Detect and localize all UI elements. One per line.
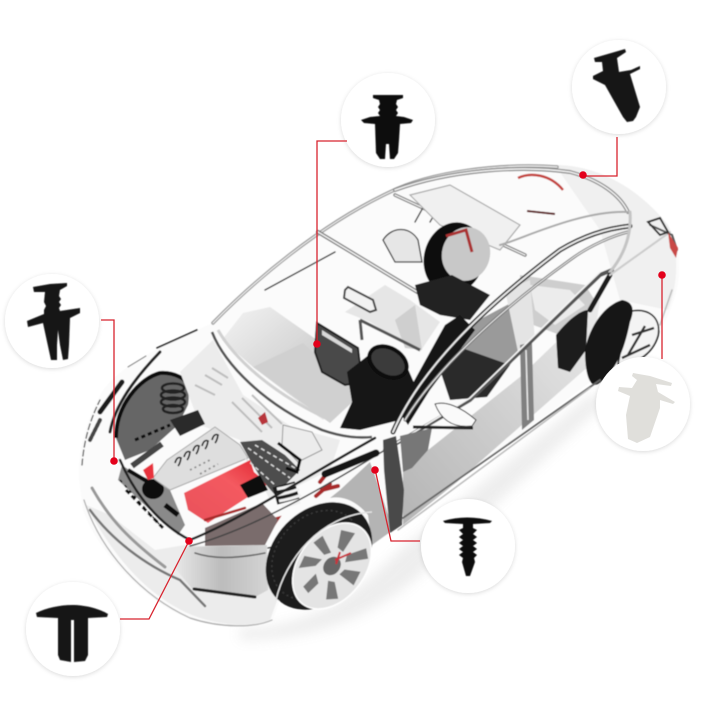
leader line: top-right to roof bbox=[579, 137, 617, 179]
front seat pale bbox=[395, 305, 422, 350]
battery box bbox=[282, 425, 322, 462]
dashboard console black bbox=[340, 350, 415, 430]
rear headrest bbox=[383, 230, 422, 262]
ground shadow bbox=[240, 395, 610, 640]
clip icon: ribbed screw clip bbox=[443, 518, 492, 576]
leader line: top-centre to seat bbox=[313, 141, 347, 348]
clip icon: left bbox=[27, 283, 80, 360]
central cabin mid grey bbox=[450, 298, 525, 395]
front headrest loop bbox=[344, 287, 376, 312]
coil spring left bbox=[161, 384, 185, 413]
clip icon: top-centre bbox=[361, 95, 413, 159]
leader line: left to engine bay bbox=[101, 320, 118, 465]
dark pillar band bbox=[398, 315, 475, 425]
bumper dark slits bbox=[82, 400, 272, 626]
small red mark bbox=[143, 463, 154, 480]
clip icon: pale plastic rivet bbox=[618, 373, 675, 443]
car body silhouette bbox=[79, 166, 679, 627]
leader line: fender to screw clip bbox=[371, 466, 420, 541]
mirror arm bbox=[413, 427, 473, 428]
callout: top-centre clip circle bbox=[341, 73, 435, 167]
instrument frame light window bbox=[322, 330, 352, 353]
engine bay deck bbox=[180, 340, 340, 500]
instrument frame dark bbox=[315, 323, 362, 385]
rear seat pale bbox=[520, 275, 598, 335]
red suspension arms bbox=[205, 472, 338, 532]
windshield lower arc bbox=[212, 332, 372, 437]
red accent on ribbed box bbox=[258, 412, 268, 425]
windshield inner arc bbox=[218, 330, 330, 420]
roof red trim bbox=[518, 175, 563, 190]
mid cabin pale floor bbox=[345, 285, 440, 352]
rear deck light area bbox=[555, 165, 676, 310]
battery handle bbox=[278, 443, 300, 472]
callout: right pale clip circle bbox=[596, 357, 690, 451]
marker dot bbox=[185, 537, 193, 545]
rear wheel tyre bbox=[585, 300, 633, 385]
marker dot bbox=[371, 466, 379, 474]
hood outline strokes bbox=[90, 330, 197, 440]
engine bay dark well bbox=[116, 373, 189, 460]
engine bay dark rim bbox=[116, 373, 187, 438]
door sill lines bbox=[398, 225, 677, 530]
clip icon: mushroom rivet bbox=[36, 605, 108, 662]
rear spoiler dark bbox=[648, 218, 668, 235]
strut tower bracket bbox=[170, 410, 205, 436]
seat structure outline bbox=[360, 320, 420, 350]
tyre tread hint bbox=[254, 493, 378, 617]
spare wheel tyre bbox=[416, 215, 492, 301]
bumper centre grey bbox=[175, 545, 268, 597]
black strut mount bbox=[142, 479, 164, 499]
marker dot bbox=[313, 340, 321, 348]
spare wheel red detail bbox=[446, 230, 472, 252]
front wheel rim bbox=[276, 508, 388, 624]
rear seat frame dark bbox=[415, 275, 490, 320]
cabin pale strip bbox=[505, 280, 535, 352]
rim spoke openings bbox=[287, 517, 379, 612]
leader line: rear to pale clip bbox=[658, 271, 666, 359]
callout: bottom-left mushroom clip circle bbox=[26, 582, 120, 676]
engine cover ribs bbox=[175, 435, 218, 474]
front door a-pillar arcs bbox=[385, 212, 630, 450]
steering wheel bbox=[364, 340, 412, 384]
front frame rails bbox=[120, 438, 385, 548]
intake manifold highlights bbox=[245, 445, 295, 485]
engine cover silver bbox=[153, 427, 248, 490]
door lower panel bbox=[403, 300, 600, 525]
intake manifold busy dark bbox=[240, 440, 300, 495]
door quarter dark bbox=[400, 428, 432, 472]
front radiator hoses bbox=[120, 425, 178, 530]
wheel arch arc bbox=[276, 512, 372, 600]
callout: left clip circle bbox=[5, 274, 99, 368]
red wheel hub mark bbox=[335, 552, 351, 564]
wing mirror bbox=[435, 403, 476, 426]
b-pillar highlight bbox=[526, 350, 528, 420]
grey dash top bbox=[253, 343, 360, 423]
car: transparent x-ray sedan bbox=[79, 165, 679, 640]
radiator and front tangle bbox=[118, 465, 185, 535]
red engine block bbox=[184, 460, 268, 523]
marker dot bbox=[579, 171, 587, 179]
front bumper panel bbox=[86, 505, 278, 625]
front fender grey panel bbox=[330, 462, 393, 545]
rear rim spokes bbox=[622, 326, 654, 358]
b-pillar bbox=[520, 342, 534, 430]
right coil spring bbox=[275, 483, 301, 507]
front door pillar dark bbox=[383, 436, 404, 533]
leader line: bumper to mushroom clip bbox=[120, 537, 193, 619]
windshield dash panel bbox=[222, 307, 358, 420]
rear seat highlight bbox=[530, 285, 585, 325]
lower engine shadow bbox=[205, 503, 278, 546]
rear wheel rim bbox=[618, 310, 659, 364]
intake block black bbox=[240, 475, 268, 498]
deck stripes bbox=[195, 368, 282, 432]
tail light bbox=[668, 232, 678, 258]
cabin lower dark bbox=[440, 348, 510, 400]
roof and windshield rails bbox=[213, 166, 628, 323]
clip icon: top-right bbox=[593, 49, 640, 122]
marker dot bbox=[110, 457, 118, 465]
callout: top-right clip circle bbox=[572, 40, 666, 134]
front wheel tyre bbox=[244, 481, 394, 631]
callout: bottom-right screw clip circle bbox=[421, 499, 515, 593]
rear red mark bbox=[527, 211, 555, 214]
marker dot bbox=[658, 271, 666, 279]
inner rear tyre bbox=[556, 310, 588, 372]
spare wheel rim bbox=[436, 222, 496, 286]
sun roof frame bbox=[410, 185, 520, 250]
